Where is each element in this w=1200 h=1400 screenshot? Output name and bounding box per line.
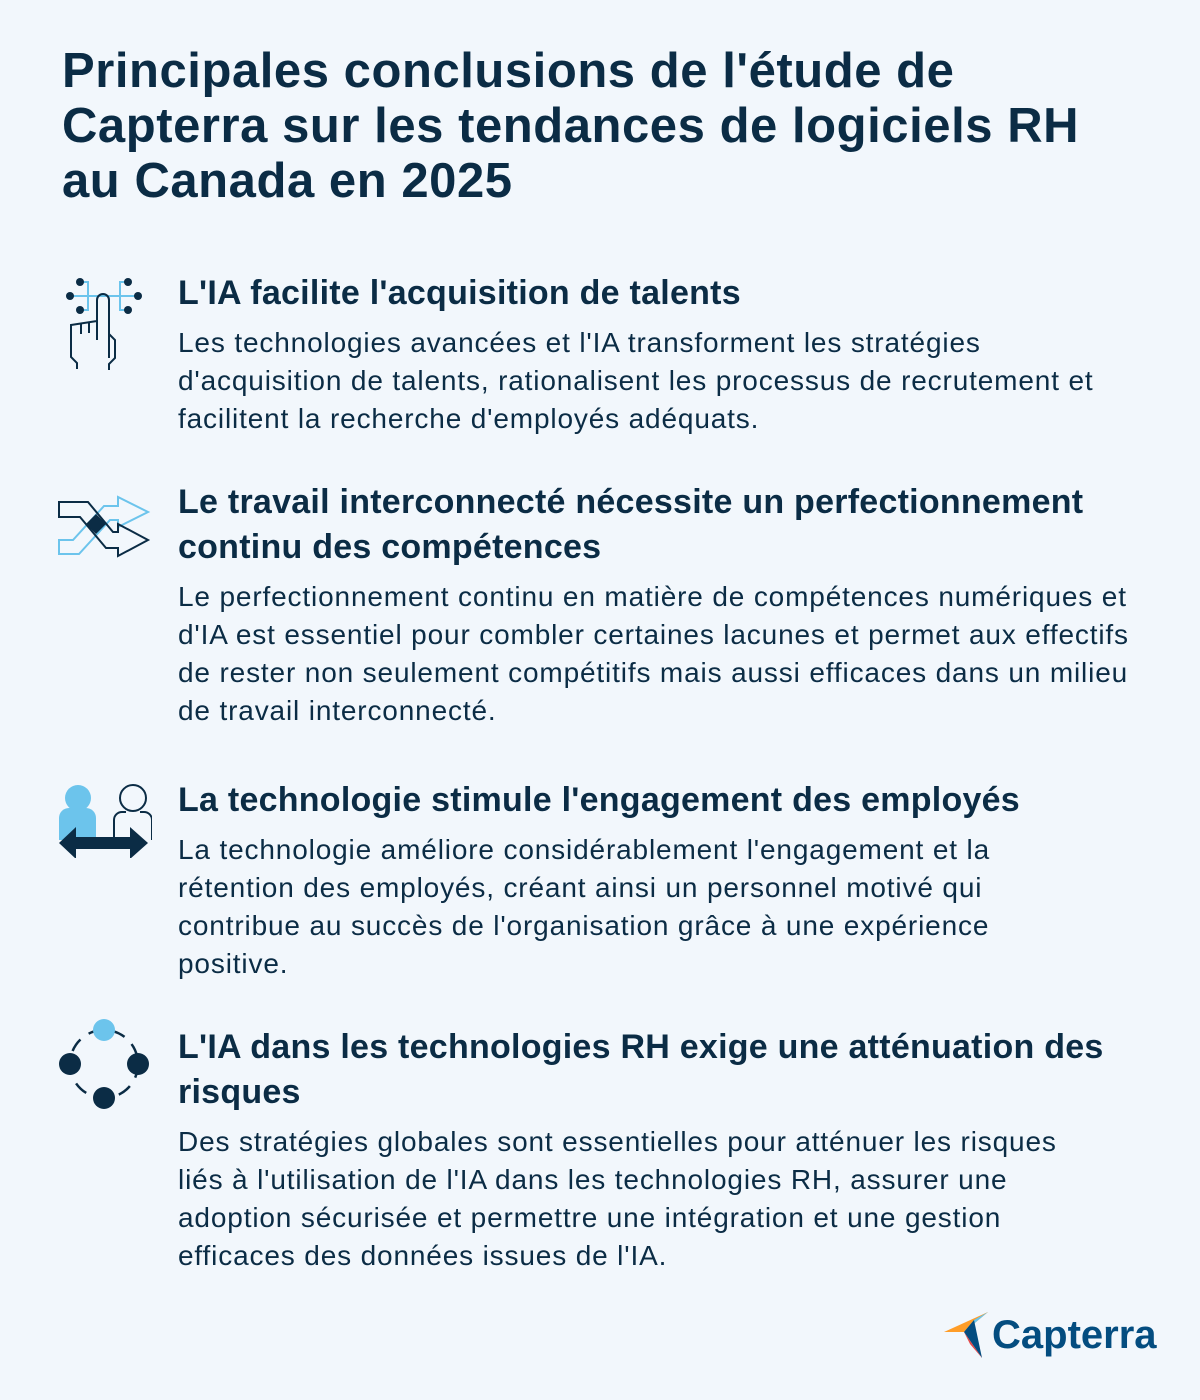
body 1: facilitent la recherche d'employés adéquats.	[178, 403, 759, 434]
body 2: de travail interconnecté.	[178, 695, 497, 726]
section 2	[178, 483, 1129, 726]
heading 2: Le travail interconnecté nécessite un perfectionnement	[178, 483, 1083, 521]
body 3: positive.	[178, 948, 288, 979]
logo: Capterra: Capterra	[992, 1313, 1157, 1357]
section 1	[178, 274, 1094, 434]
title: au Canada en 2025	[62, 154, 513, 208]
body 3: La technologie améliore considérablement l'engagement et la	[178, 834, 990, 865]
icon: crossing arrows	[58, 495, 150, 558]
heading 2: continu des compétences	[178, 528, 601, 566]
title: Principales conclusions de l'étude de	[62, 44, 954, 98]
title: Capterra sur les tendances de logiciels RH	[62, 99, 1079, 153]
body 2: d'IA est essentiel pour combler certaines lacunes et permet aux effectifs	[178, 619, 1129, 650]
body 3: contribue au succès de l'organisation grâce à une expérience	[178, 910, 989, 941]
body 3	[178, 834, 990, 979]
body 2: de rester non seulement compétitifs mais aussi efficaces dans un milieu	[178, 657, 1128, 688]
icon: hand with network	[66, 278, 142, 370]
heading 4: L'IA dans les technologies RH exige une atténuation des	[178, 1028, 1104, 1066]
heading 4: risques	[178, 1073, 301, 1111]
body 4: Des stratégies globales sont essentielles pour atténuer les risques	[178, 1126, 1057, 1157]
body 4: adoption sécurisée et permettre une intégration et une gestion	[178, 1202, 1001, 1233]
heading 3: La technologie stimule l'engagement des employés	[178, 781, 1020, 819]
body 2: Le perfectionnement continu en matière de compétences numériques et	[178, 581, 1127, 612]
icon: two people with arrow	[59, 784, 152, 858]
heading 2	[178, 483, 1083, 566]
body 1: d'acquisition de talents, rationalisent les processus de recrutement et	[178, 365, 1094, 396]
icon: circle of nodes	[59, 1019, 149, 1109]
body 4: liés à l'utilisation de l'IA dans les technologies RH, assurer une	[178, 1164, 1007, 1195]
heading 1: L'IA facilite l'acquisition de talents	[178, 274, 741, 312]
body 3: rétention des employés, créant ainsi un personnel motivé qui	[178, 872, 982, 903]
body 2	[178, 581, 1129, 726]
title	[62, 44, 1079, 208]
heading 4	[178, 1028, 1104, 1111]
section 4	[178, 1028, 1104, 1271]
section 3	[178, 781, 1020, 979]
body 1	[178, 327, 1094, 434]
body 1: Les technologies avancées et l'IA transforment les stratégies	[178, 327, 981, 358]
body 4: efficaces des données issues de l'IA.	[178, 1240, 667, 1271]
body 4	[178, 1126, 1057, 1271]
